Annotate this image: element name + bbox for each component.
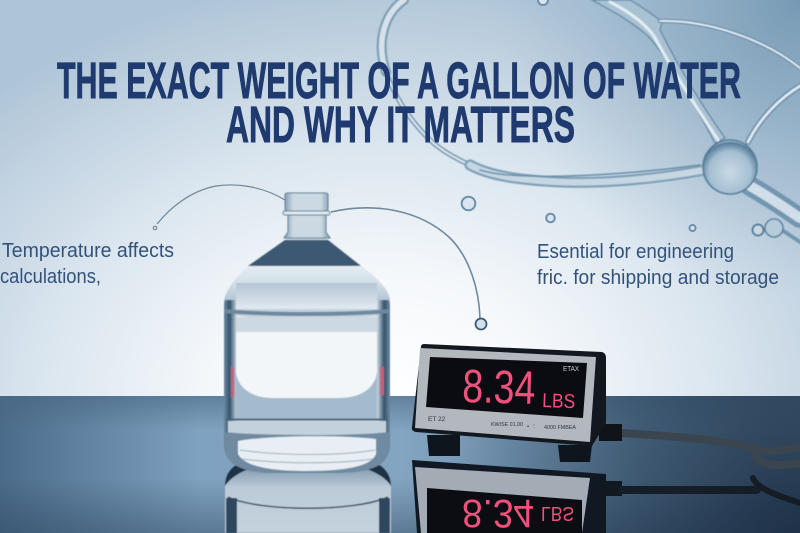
scale reflection: LBS [541, 502, 574, 524]
water bottle reflection [225, 458, 391, 533]
scale reflection [412, 460, 622, 533]
bottle groove [224, 309, 390, 316]
connector wire right with bead [331, 208, 486, 330]
bottle neck [284, 193, 330, 238]
bottle lower water [236, 372, 377, 419]
bottle label shadow [236, 317, 377, 332]
scale small labels: • ⋮ [527, 424, 537, 430]
scale small labels: 4000 FMBEA [544, 425, 576, 431]
digital scale [412, 344, 606, 446]
right callout text: Esential for engineering [537, 241, 734, 263]
scale small labels [428, 366, 579, 431]
bottle base highlight [238, 436, 376, 471]
left callout text: calculations, [0, 266, 101, 288]
title [57, 52, 741, 153]
background [0, 0, 800, 400]
left callout text: Temperature affects [2, 240, 174, 262]
bottle water panel [236, 316, 377, 398]
bottle collar [283, 211, 330, 215]
right callout text: fric. for shipping and storage [537, 267, 779, 289]
right callout text [537, 241, 779, 289]
title: AND WHY IT MATTERS [226, 96, 575, 153]
scale reading 8.34: 8.34 [462, 359, 536, 414]
power cable [599, 424, 800, 503]
water molecule strands [382, 0, 800, 242]
scale small labels: ET 22 [428, 416, 446, 423]
left callout text [0, 240, 174, 288]
scale small labels: ETAX [563, 366, 579, 373]
bottle shoulder light band [224, 266, 390, 300]
bottle lower glass [228, 421, 386, 437]
bottle shoulder dark water band [248, 240, 361, 266]
bottle water line [226, 418, 388, 420]
scale feet [427, 435, 592, 462]
connector wire left [153, 185, 285, 230]
bottle base lines [240, 450, 375, 463]
water bottle [224, 193, 390, 473]
decorative water bubbles [462, 0, 696, 231]
bottle base rim [225, 432, 389, 473]
scale unit LBS: LBS [542, 390, 576, 413]
bottle upper panel [236, 283, 377, 309]
scale small labels: KWISE 01.00 [491, 422, 523, 428]
scale screen [426, 357, 587, 418]
pink reflections of display [231, 367, 384, 397]
scale face [415, 348, 596, 442]
tabletop [0, 396, 800, 533]
